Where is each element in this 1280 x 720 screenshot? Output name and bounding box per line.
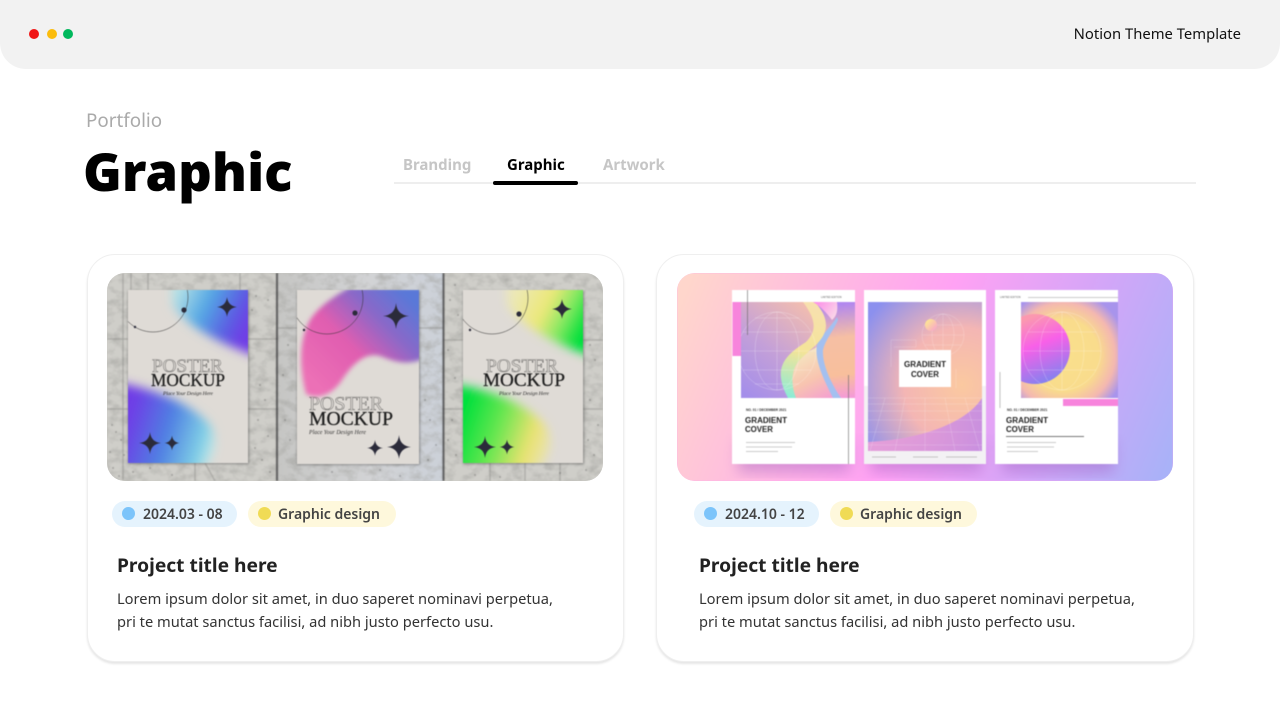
template name: Notion Theme Template (1074, 24, 1241, 44)
poster: green and yellow: Place Your Design Here (498, 391, 550, 397)
project description: Lorem ipsum dolor sit amet, in duo saperet nominavi perpetua, (699, 589, 1135, 609)
tag: category: Graphic design (278, 505, 380, 524)
poster: blue and purple: Place Your Design Here (162, 391, 214, 397)
project description: Lorem ipsum dolor sit amet, in duo saperet nominavi perpetua, (117, 589, 553, 609)
cover: circle poster: GRADIENT (1006, 416, 1048, 425)
wall texture (107, 273, 603, 481)
poster: blue and purple (126, 289, 250, 466)
project description: pri te mutat sanctus facilisi, ad nibh justo perfecto usu. (699, 612, 1075, 632)
window dot: red (29, 29, 39, 39)
cover: centred title poster (864, 290, 986, 464)
project title: Project title here (699, 551, 860, 578)
poster: green and yellow: POSTER (486, 356, 558, 377)
cover: circle poster: LIMITED EDITION (1000, 296, 1021, 299)
tag: date range (112, 501, 237, 527)
project title: Project title here (117, 551, 278, 578)
tag: category (248, 501, 396, 527)
gradient background (677, 273, 1173, 481)
tab rail (394, 182, 1196, 184)
poster: pink and blue: MOCKUP (309, 408, 393, 430)
poster: blue and purple: MOCKUP (151, 370, 225, 390)
window dot: yellow (47, 29, 57, 39)
project description (699, 589, 1135, 632)
eyebrow: portfolio: Portfolio (86, 107, 162, 133)
poster: green and yellow (462, 289, 586, 466)
image: poster mockups on concrete wall (107, 273, 603, 481)
tag: date range: 2024.03 - 08 (143, 505, 223, 524)
window dot: green (63, 29, 73, 39)
cover: wave poster: NO. 01 / DECEMBER 2021 (746, 408, 786, 412)
poster shadows (738, 440, 1114, 472)
project description: pri te mutat sanctus facilisi, ad nibh justo perfecto usu. (117, 612, 493, 632)
cover: centred title poster: GRADIENT (904, 360, 946, 369)
poster: pink and blue: Place Your Design Here (308, 430, 366, 436)
tab: artwork: Artwork (603, 155, 665, 175)
project description (117, 589, 553, 632)
cover: wave poster: GRADIENT (745, 416, 787, 425)
image: gradient cover posters (677, 273, 1173, 481)
poster: pink and blue: POSTER (309, 393, 384, 415)
title: Graphic (83, 136, 292, 207)
cover: circle poster (995, 290, 1118, 464)
tag: date range: 2024.10 - 12 (725, 505, 805, 524)
panel: card 2 (656, 254, 1194, 662)
active tab underline (493, 181, 578, 185)
poster: blue and purple: POSTER (152, 356, 223, 377)
cover: wave poster: COVER (745, 425, 773, 434)
cover: wave poster (732, 290, 855, 464)
panel: card 1 (87, 254, 624, 662)
tab: graphic active: Graphic (507, 155, 565, 175)
cover: centred title poster: COVER (911, 370, 939, 379)
poster: pink and blue (296, 289, 422, 466)
tag: category: Graphic design (860, 505, 962, 524)
cover: circle poster: NO. 01 / DECEMBER 2021 (1007, 408, 1047, 412)
cover: wave poster: LIMITED EDITION (821, 296, 842, 299)
poster: green and yellow: MOCKUP (483, 370, 565, 391)
tab navigation (394, 155, 1196, 185)
cover: circle poster: COVER (1006, 425, 1034, 434)
tab: branding: Branding (403, 155, 471, 175)
top bar (0, 0, 1280, 69)
tag: category (830, 501, 977, 527)
tag: date range (694, 501, 819, 527)
